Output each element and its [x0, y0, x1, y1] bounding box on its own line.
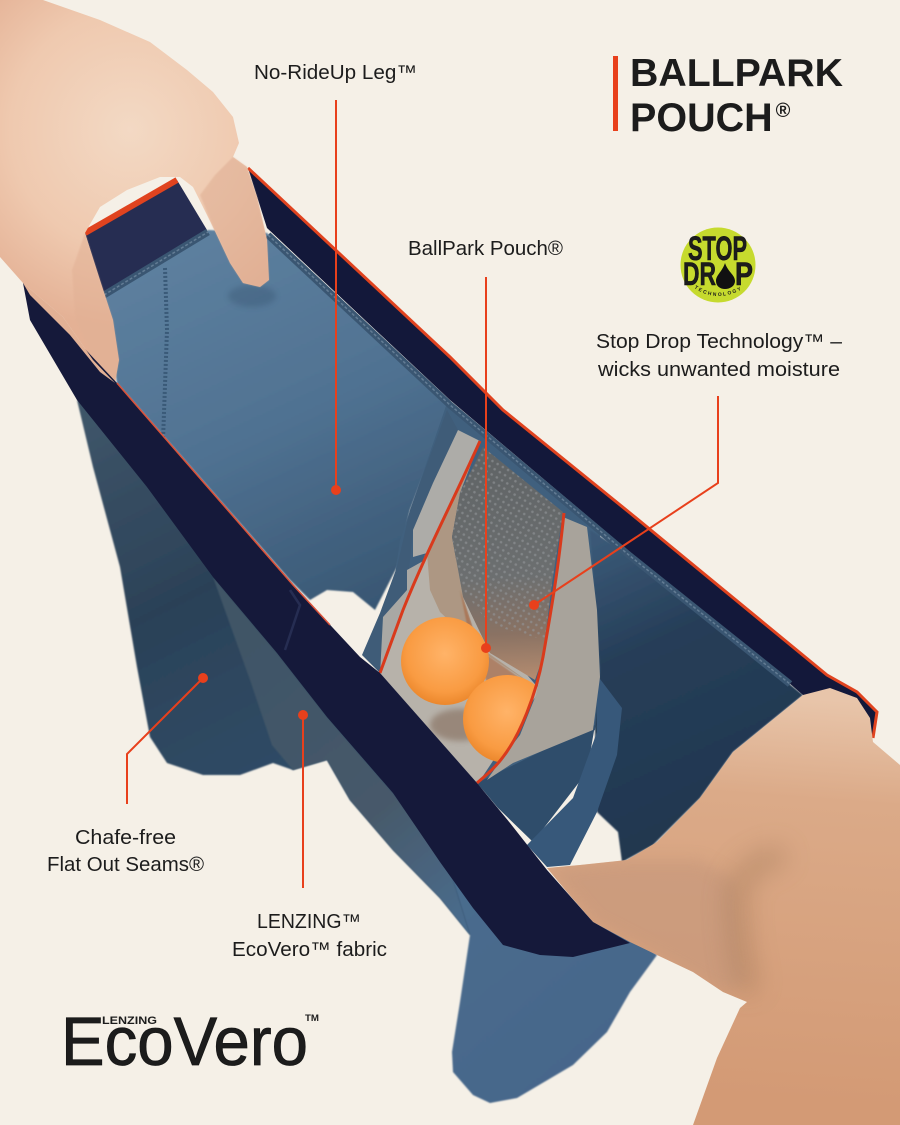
dot [198, 673, 208, 683]
thumb tip over band [23, 283, 115, 383]
label: No-RideUp Leg™ [254, 62, 417, 84]
pouch inner warm area [427, 441, 540, 690]
outer fabric, left leg [77, 400, 520, 935]
label: Flat Out Seams® [47, 854, 204, 876]
waistband seam [285, 590, 300, 650]
waistband stitch [104, 232, 790, 684]
icon: stop drop badge: DR [683, 256, 716, 292]
dot [481, 643, 491, 653]
label: wicks unwanted moisture [597, 359, 840, 381]
logo: lenzing ecovero: EcoVero [61, 1003, 308, 1080]
logo: lenzing ecovero: TM [305, 1013, 319, 1023]
callout: lenzing ecovero fabric [232, 710, 387, 961]
title line 2: ® [776, 100, 791, 122]
finger shading [200, 157, 269, 287]
fabric, below pouch [477, 725, 595, 842]
waistband red edge [85, 168, 877, 738]
leader line [485, 277, 487, 648]
dot [298, 710, 308, 720]
left hand [0, 0, 269, 383]
callout: ballpark pouch [408, 238, 563, 653]
thumb shading [547, 860, 745, 992]
pouch inside lower lining [380, 555, 540, 785]
right hand [547, 688, 900, 1125]
callout: no-ride-up leg [254, 62, 417, 495]
top waistband left part [85, 180, 207, 292]
knuckle shadow [737, 855, 785, 992]
leader line [335, 100, 337, 490]
pouch mesh [452, 447, 563, 680]
ball shadow [430, 709, 490, 741]
dot [331, 485, 341, 495]
leader line [302, 715, 304, 888]
pouch warm shadow [460, 590, 530, 690]
garment [77, 168, 877, 1103]
leader line [534, 396, 718, 605]
inner fabric seam [163, 268, 167, 440]
label: EcoVero™ fabric [232, 939, 387, 961]
icon: stop drop badge [680, 228, 756, 302]
label: Chafe-free [75, 827, 176, 849]
logo: lenzing ecovero: LENZING [102, 1015, 157, 1027]
top waistband [248, 168, 877, 738]
finger shadow on fabric [228, 285, 276, 307]
ball 1 [401, 617, 489, 705]
pouch lining lower-left [380, 560, 425, 675]
dot [529, 600, 539, 610]
callout: chafe-free seams [47, 673, 208, 876]
label: LENZING™ [257, 911, 361, 933]
front waistband [23, 283, 630, 957]
label: BallPark Pouch® [408, 238, 563, 260]
icon: stop drop badge: STOP [688, 230, 747, 268]
leader line [127, 678, 203, 804]
pouch red edges [380, 441, 564, 783]
thumb shading [72, 233, 119, 383]
fabric, fold beside pouch [527, 675, 622, 867]
icon: stop drop badge: TECHNOLOGY [695, 285, 740, 296]
inner fabric, right of pouch [590, 530, 803, 862]
ball 2 [463, 675, 535, 762]
title line 1: BALLPARK [630, 52, 843, 95]
outer fabric, hanging lower leg [450, 870, 657, 1103]
accent bar [613, 56, 618, 131]
inner fabric, blue panel [103, 230, 450, 610]
title [613, 52, 843, 140]
label: Stop Drop Technology™ – [596, 331, 843, 353]
title line 2: POUCH [630, 96, 773, 140]
pouch lining right [487, 517, 600, 780]
pouch lining left [413, 430, 480, 557]
callout: stop drop technology [529, 331, 848, 610]
front waistband red edge [117, 383, 330, 625]
icon: stop drop badge: P [735, 256, 753, 292]
pouch backing [380, 403, 604, 790]
leg opening showing background [315, 604, 373, 660]
pouch seam fabric, left [362, 410, 458, 673]
outer fabric, lighter strip by waistband [213, 577, 470, 935]
